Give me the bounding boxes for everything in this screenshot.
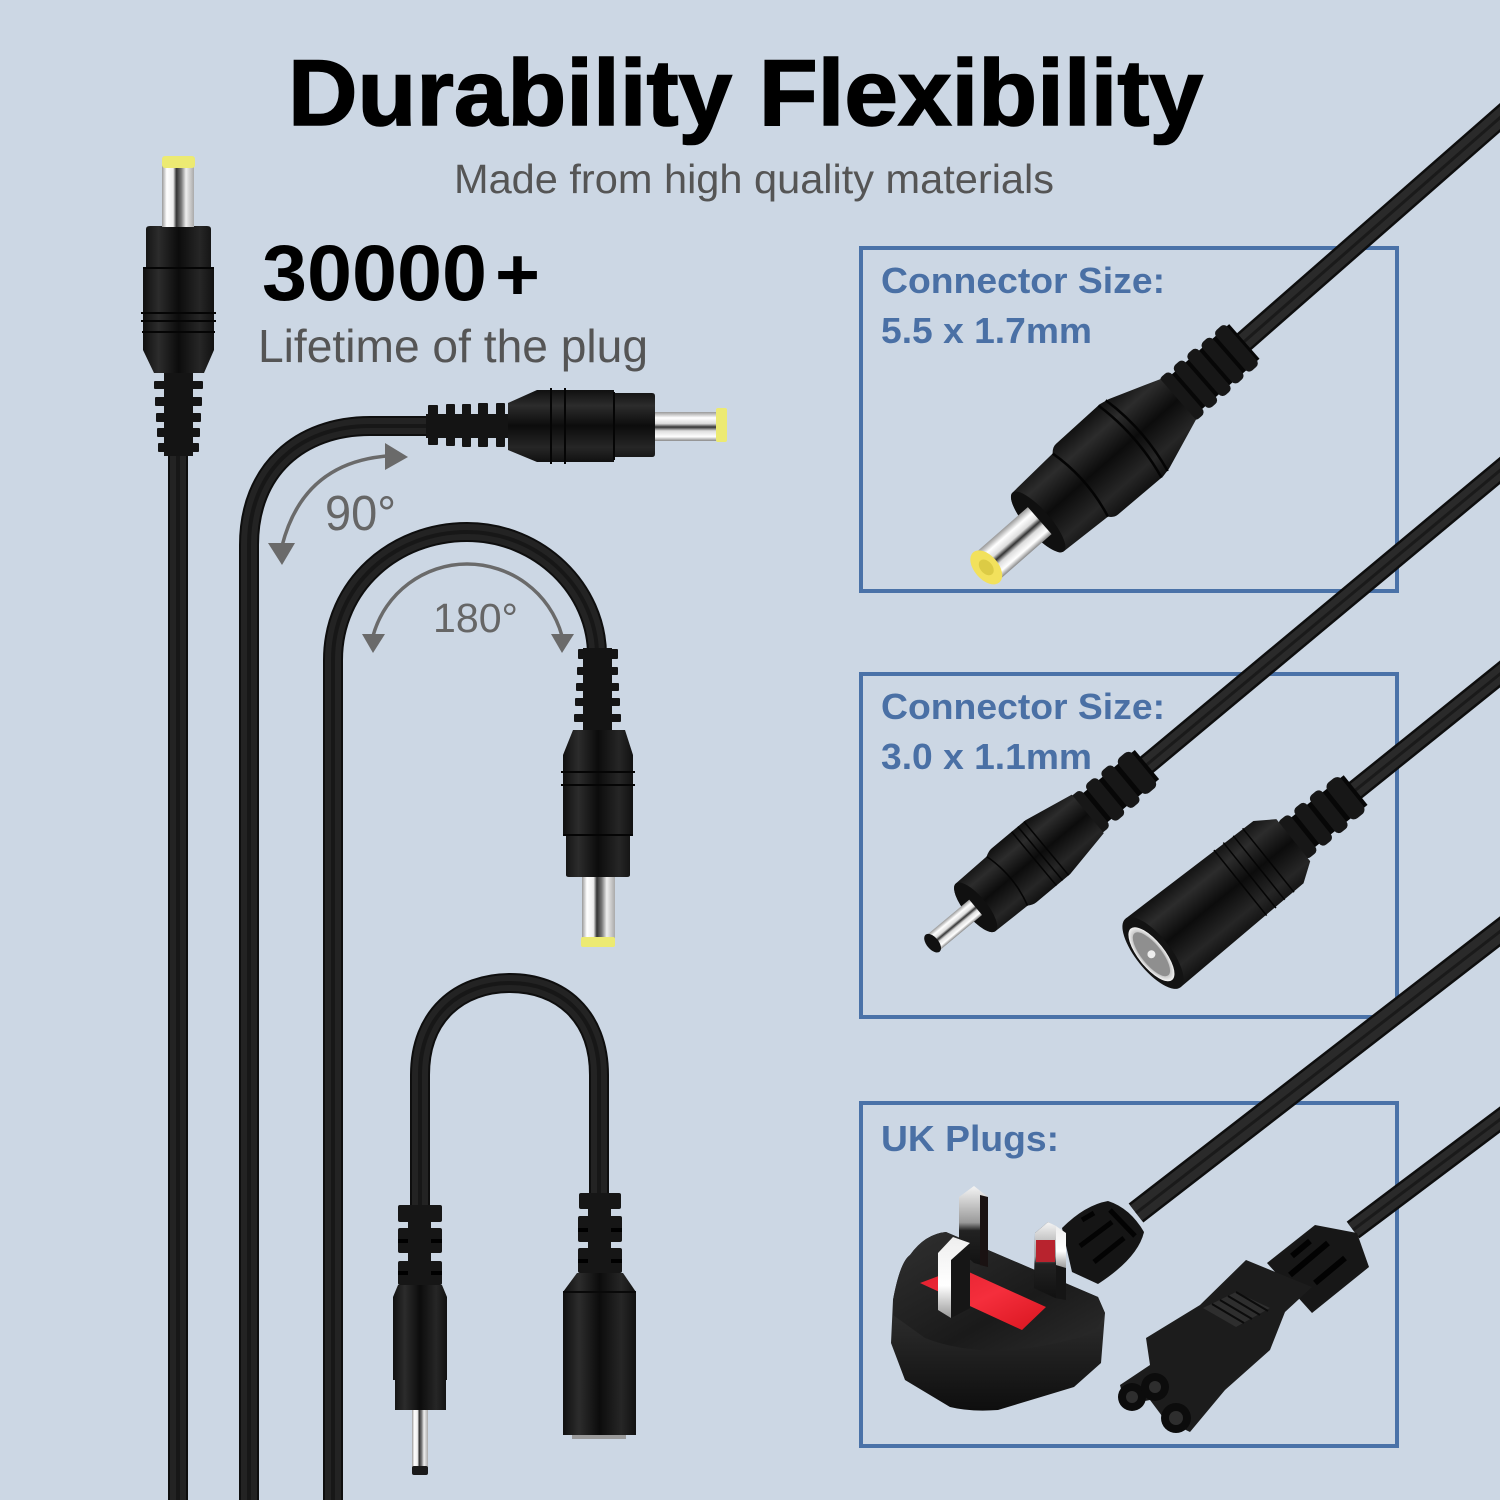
right socket body (563, 1273, 636, 1435)
panel heading: Connector Size: (881, 260, 1165, 301)
left plug body (393, 1285, 447, 1410)
yellow tip (162, 156, 195, 168)
ribbed grip patch (1203, 1292, 1270, 1327)
live pin (1034, 1222, 1066, 1300)
cable: U-bend with 3.0mm plug and socket (393, 983, 636, 1475)
cable: straight with upward 5.5mm plug (141, 156, 216, 1500)
strain relief (1062, 746, 1162, 841)
three outlet lobes (1118, 1373, 1191, 1433)
plug body (998, 363, 1210, 566)
left metal pin (412, 1410, 428, 1468)
panel: connector 3.0 x 1.1mm (861, 674, 1397, 1017)
connector grip (1267, 1225, 1369, 1313)
metal pin (926, 900, 982, 951)
socket rim (572, 1435, 626, 1439)
title: Durability Flexibility (288, 40, 1203, 145)
label: 90 degrees: 90° (325, 487, 396, 541)
socket body (1125, 806, 1321, 987)
cable: 90 degree bend with 5.5mm plug (249, 388, 727, 1500)
cable and socket: 3.0 x 1.1mm diagonal (1112, 574, 1500, 998)
panel frame (861, 1103, 1397, 1446)
panel size value: 3.0 x 1.1mm (881, 736, 1092, 777)
cable (1133, 379, 1500, 779)
connector body (1120, 1260, 1312, 1432)
pin tip (921, 931, 944, 955)
arrow: 90 degree bend (268, 443, 408, 565)
strain relief (574, 648, 621, 732)
plug strain relief (1062, 1201, 1144, 1284)
cable: C5 connector (1353, 1112, 1500, 1230)
strain relief (426, 403, 511, 447)
panel frame (861, 248, 1397, 591)
yellow tip (964, 544, 1008, 590)
metal pin (582, 877, 615, 939)
socket face (1121, 920, 1182, 988)
right strain relief (578, 1193, 622, 1277)
yellow tip (581, 937, 615, 947)
panel: UK plugs (861, 1103, 1397, 1446)
arrow: 180 degree bend (362, 564, 574, 653)
stat: 30000+ lifetime (258, 228, 648, 372)
earth pin (959, 1186, 988, 1267)
plug body (143, 226, 214, 373)
cable (1341, 600, 1500, 805)
panel size value: 5.5 x 1.7mm (881, 310, 1092, 351)
cable and plug: 3.0 x 1.1mm diagonal (906, 360, 1500, 974)
stat caption: Lifetime of the plug (258, 320, 648, 372)
panel heading: Connector Size: (881, 686, 1165, 727)
metal pin (975, 507, 1052, 580)
panel: connector 5.5 x 1.7mm (861, 248, 1397, 591)
panel heading: UK Plugs: (881, 1118, 1059, 1159)
plug body (945, 787, 1110, 941)
plug: C5 cloverleaf connector (1118, 1225, 1369, 1433)
plug housing top face (893, 1232, 1105, 1351)
yellow tip (716, 408, 727, 442)
panel frame (861, 674, 1397, 1017)
metal pin (162, 165, 194, 227)
plug: UK three-pin (891, 1186, 1144, 1411)
left strain relief (398, 1205, 442, 1287)
strain relief (1151, 320, 1263, 428)
red label (920, 1268, 1046, 1330)
cable: 180 degree bend with 5.5mm plug (333, 532, 635, 1500)
cable: UK mains (1136, 916, 1500, 1213)
strain relief (154, 372, 203, 456)
strain relief (1270, 771, 1371, 865)
stat number: 30000 (262, 228, 487, 317)
cable and plug: 5.5 x 1.7mm diagonal (946, 0, 1500, 611)
label: 180 degrees: 180° (433, 595, 518, 641)
stat plus sign: + (495, 233, 540, 316)
plug body (563, 730, 633, 877)
plug housing side (891, 1232, 1105, 1411)
subtitle: Made from high quality materials (454, 156, 1054, 202)
metal pin (655, 412, 718, 441)
plug body (508, 390, 655, 462)
neutral pin (938, 1237, 970, 1318)
left pin tip (412, 1466, 428, 1475)
cable (1230, 10, 1500, 356)
